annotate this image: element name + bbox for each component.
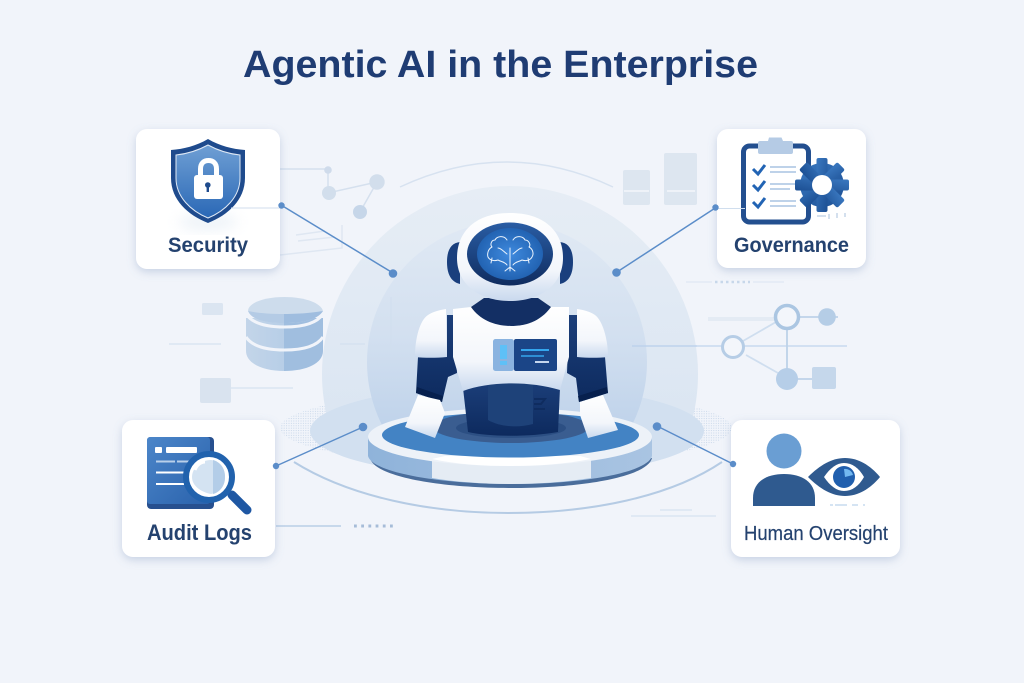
decoration: node network top left [280,166,385,255]
outer halo circle [322,186,698,465]
decoration: node network right [697,306,847,390]
icon: shield with padlock [171,139,245,230]
label: Security: Security [168,234,248,257]
platform inner ring [456,418,566,438]
document lines [155,447,162,453]
magnifier ring [186,454,232,500]
right wrist cuff [578,387,608,402]
platform top [368,408,652,466]
decoration: top arc [400,162,613,187]
right hand [580,395,618,438]
left ear [447,242,460,284]
connector: audit logs [273,423,367,469]
clipboard clip [758,138,793,154]
iris [833,466,855,488]
checklist ticks [753,165,765,207]
robot lower torso [463,380,560,436]
faint dashes under eye [830,504,865,506]
chest badge [493,339,557,371]
decoration: left small blocks and lines [169,303,293,403]
halftone band [280,390,732,466]
platform side [368,437,652,484]
torso side marks [534,399,545,409]
decoration: dotted divider under governance [686,281,784,283]
platform light facet [432,458,591,484]
panel: audit logs [122,420,275,557]
badge indicator base [500,361,507,365]
icon: person and eye [753,434,880,506]
document face [147,437,210,504]
inner halo circle [367,274,647,424]
platform [368,408,652,488]
connector: governance [612,204,745,277]
label: Governance: Governance [734,234,849,257]
title: Agentic AI in the Enterprise [243,44,758,86]
left wrist cuff [416,387,443,402]
decoration: lines bottom right [631,510,716,516]
panel: governance [717,129,866,268]
card background [717,129,866,268]
badge indicator [500,345,507,359]
document depth [147,437,214,509]
badge screen lines [521,349,549,351]
robot right arm [567,315,608,402]
iris highlight [844,469,853,477]
label: Audit Logs: Audit Logs [147,520,252,545]
magnifier glass [192,460,225,494]
platform dark ring [433,411,589,443]
decoration: lines bottom left [276,525,394,527]
robot left arm [416,315,457,402]
connector: security [231,202,397,278]
infographic canvas [118,50,904,564]
right shoulder [577,309,608,358]
card background [731,420,900,557]
panel: security [136,129,280,269]
neck [471,298,551,326]
halo circles clipped to base [310,186,704,465]
gear [795,158,849,212]
base glow ellipse [310,398,704,456]
person body [753,474,815,506]
orbit arc [294,462,722,513]
badge left tile [493,339,514,371]
icon: brain [488,237,533,271]
face screen [477,228,543,280]
card background [122,420,275,557]
torso inner panel [488,381,533,426]
clipboard board [744,146,808,222]
panel: human oversight [731,420,900,557]
visor [467,222,553,286]
label: Human Oversight: Human Oversight [744,523,888,545]
icon: clipboard and gear [744,138,849,222]
checklist lines [770,167,796,206]
torso white shell [453,307,569,391]
platform shadow rim [370,458,652,488]
halo detail lines [632,345,697,347]
faint ticks below gear [817,213,845,219]
decoration: database cylinder [246,297,323,371]
robot [405,213,618,438]
card background [136,129,280,269]
connector: human oversight [653,422,736,467]
platform blue disc [382,412,639,458]
decoration: document blocks top right [623,153,697,205]
background decoration: network, database, panels [169,153,847,526]
icon: document with magnifier [147,437,247,510]
magnifier handle [232,495,247,510]
person head [766,434,802,468]
central halo rings [281,186,731,514]
eye outline [808,458,880,496]
helmet [457,213,563,301]
badge screen [514,339,557,371]
platform highlight [432,456,591,466]
left shoulder [415,309,447,358]
right ear [560,242,573,284]
halo detail lines left [340,297,391,350]
left hand [405,395,445,438]
eye white [824,463,864,491]
